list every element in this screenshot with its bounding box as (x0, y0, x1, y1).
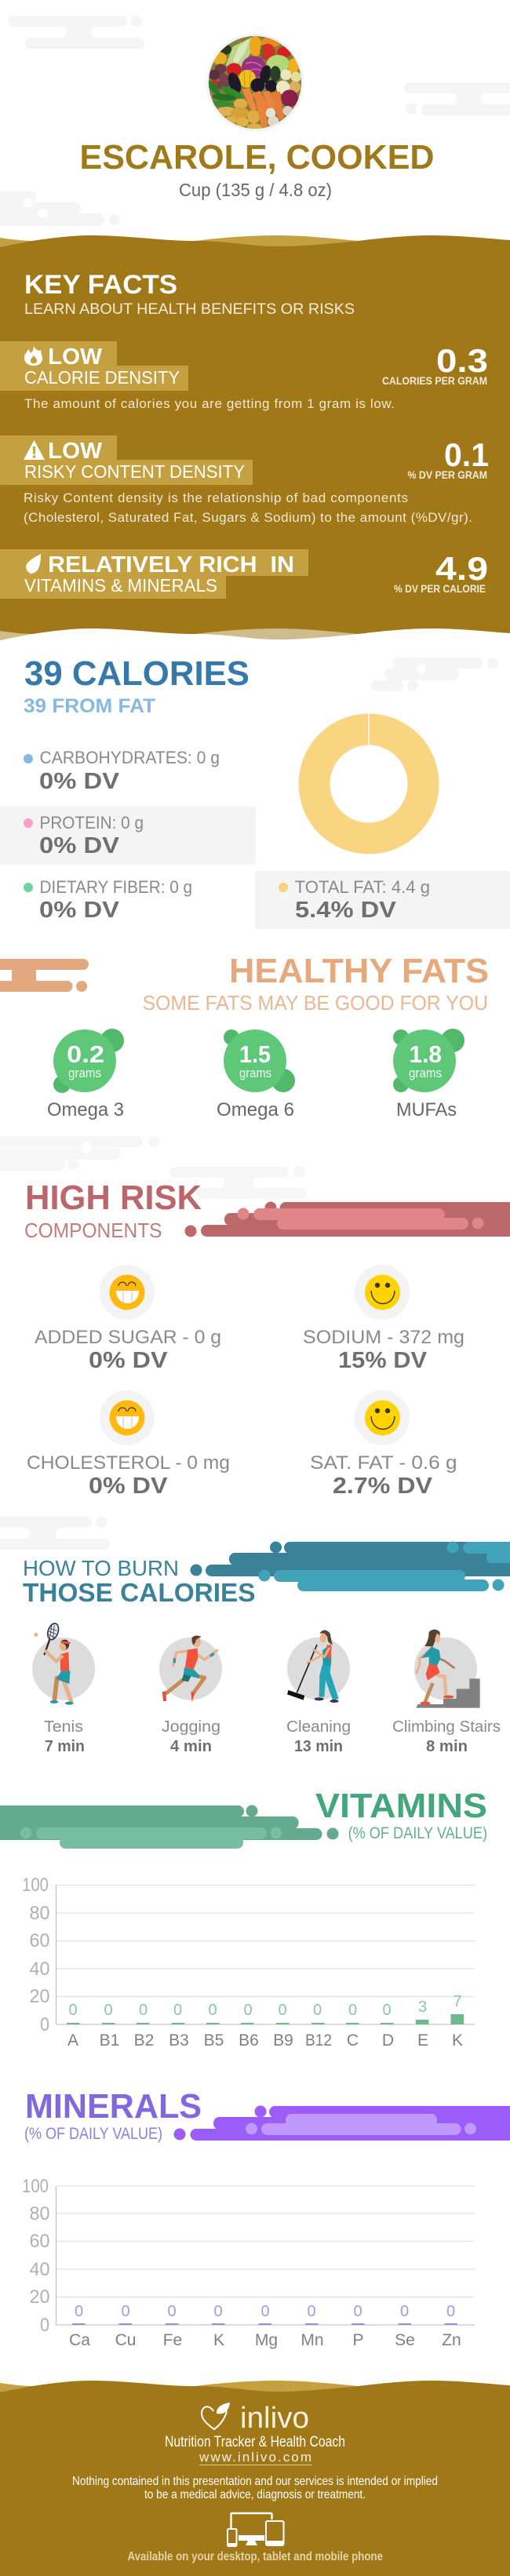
bar chart: vitamins: B2 (134, 2031, 154, 2050)
decorative stripes (185, 1202, 510, 1237)
heading: HEALTHY FATS (229, 952, 489, 990)
activity: cleaning: 13 min (294, 1738, 343, 1755)
bar chart: minerals: 0 (400, 2303, 409, 2320)
added sugar: 0% DV (89, 1348, 168, 1373)
legend: dietary fiber: DIETARY FIBER: 0 g (39, 877, 192, 897)
panel: calories (0, 654, 510, 929)
legend: dietary fiber: 0% DV (39, 898, 120, 923)
bar chart: minerals: Cu (115, 2331, 136, 2349)
added sugar: ADDED SUGAR - 0 g (35, 1327, 221, 1348)
bar chart: minerals: 0 (213, 2303, 223, 2320)
icon: person on stairs (416, 1630, 480, 1708)
value: 4.9 (435, 550, 488, 587)
unit: CALORIES PER GRAM (382, 375, 487, 387)
panel: key facts (0, 235, 510, 655)
legend: carbohydrates: 0% DV (39, 769, 120, 794)
mufas: MUFAs (396, 1099, 457, 1120)
legend: protein: PROTEIN: 0 g (39, 813, 144, 833)
label: RELATIVELY RICH IN (48, 552, 294, 578)
bar chart: vitamins: 20 (30, 1986, 50, 2007)
legend: carbohydrates: CARBOHYDRATES: 0 g (39, 748, 220, 767)
heading: MINERALS (25, 2087, 202, 2126)
subheading: (% OF DAILY VALUE) (348, 1824, 487, 1842)
heading: VITAMINS (315, 1787, 487, 1825)
icon: runner (162, 1635, 217, 1702)
cholesterol: 0% DV (89, 1474, 168, 1499)
label: LOW (48, 439, 103, 464)
icon: flame (24, 345, 42, 366)
bar chart: minerals: 100 (22, 2176, 49, 2197)
bar chart: vitamins: C (347, 2031, 359, 2050)
activity: jogging: 4 min (170, 1738, 212, 1755)
bar chart: vitamins: 60 (30, 1930, 50, 1951)
saturated fat: 2.7% DV (333, 1474, 433, 1499)
tagline: Nutrition Tracker & Health Coach (165, 2434, 345, 2450)
serving size: Cup (135 g / 4.8 oz) (179, 180, 332, 200)
bar chart: vitamins: 100 (22, 1875, 49, 1896)
bar chart: minerals: 60 (30, 2231, 50, 2252)
header panel (0, 16, 510, 226)
bar chart: minerals: 40 (30, 2259, 50, 2280)
activity: jogging: Jogging (162, 1718, 220, 1736)
availability note: Available on your desktop, tablet and mobile phone (127, 2550, 383, 2563)
bar chart: vitamins: 0 (208, 2002, 217, 2019)
bar chart: minerals: Fe (163, 2331, 182, 2349)
website link: www.inlivo.com (199, 2450, 311, 2465)
activity: tennis (32, 1622, 95, 1755)
saturated fat (310, 1390, 457, 1499)
activity: climbing stairs: Climbing Stairs (392, 1718, 501, 1736)
mufas (393, 1029, 464, 1120)
title: ESCAROLE, COOKED (80, 138, 435, 177)
mufas: grams (409, 1066, 442, 1080)
bar chart: vitamins: B1 (100, 2031, 119, 2050)
bar chart: minerals: Zn (442, 2331, 461, 2349)
unit: % DV PER CALORIE (394, 583, 486, 595)
label: LOW (48, 344, 103, 370)
bar chart: vitamins: B9 (273, 2031, 293, 2050)
bar chart: vitamins: B12 (305, 2031, 332, 2050)
fact: calorie density (0, 341, 488, 411)
heading: calories: 39 CALORIES (24, 654, 250, 693)
bar chart: vitamins: 0 (40, 2014, 49, 2035)
icon: smile face (355, 1390, 410, 1445)
description: Risky Content density is the relationship of bad components (24, 490, 408, 505)
bar chart: minerals: 20 (30, 2286, 50, 2308)
bar chart: vitamins: 0 (104, 2002, 113, 2019)
bar chart: minerals: Se (395, 2331, 415, 2349)
decorative cloud (0, 959, 89, 992)
subheading: LEARN ABOUT HEALTH BENEFITS OR RISKS (24, 301, 355, 318)
bar chart: vitamins: K (452, 2031, 463, 2050)
bar chart: vitamins: B6 (239, 2031, 259, 2050)
icon: warning (24, 440, 45, 460)
legend: dietary fiber (24, 877, 192, 923)
icon: smile face (355, 1265, 410, 1320)
mufas: 1.8 (410, 1040, 442, 1068)
icon: grin face (100, 1265, 155, 1320)
activity: climbing stairs: 8 min (426, 1738, 468, 1755)
activity: cleaning: Cleaning (286, 1718, 351, 1736)
omega 3: Omega 3 (47, 1099, 124, 1120)
omega 3 (47, 1029, 124, 1120)
icon: leaf (26, 554, 41, 574)
logo (202, 2402, 309, 2435)
subheading: SOME FATS MAY BE GOOD FOR YOU (143, 991, 488, 1015)
bar chart: vitamins: 0 (313, 2002, 322, 2019)
bar chart: vitamins: 0 (278, 2002, 287, 2019)
disclaimer: Nothing contained in this presentation and our services is intended or implied (72, 2475, 438, 2488)
bar chart: minerals (22, 2176, 475, 2349)
subheading: (% OF DAILY VALUE) (24, 2125, 162, 2143)
panel: minerals (22, 2087, 510, 2349)
disclaimer: to be a medical advice, diagnosis or treatment. (144, 2488, 366, 2501)
cholesterol: CHOLESTEROL - 0 mg (27, 1452, 230, 1474)
bar chart: minerals: Mn (301, 2331, 324, 2349)
heading: key facts: KEY FACTS (24, 270, 177, 300)
panel: vitamins (0, 1787, 487, 2050)
sodium: SODIUM - 372 mg (303, 1327, 464, 1348)
fact: risky content density (0, 435, 489, 525)
legend: total fat (255, 871, 510, 929)
bar chart: minerals: Mg (255, 2331, 278, 2349)
unit: % DV PER GRAM (408, 469, 487, 481)
heading: THOSE CALORIES (23, 1579, 256, 1608)
saturated fat: SAT. FAT - 0.6 g (310, 1452, 457, 1474)
bar chart: vitamins: A (67, 2031, 78, 2050)
added sugar (35, 1265, 221, 1373)
decorative stripes (190, 1541, 510, 1591)
activity: tennis: 7 min (45, 1738, 85, 1755)
bar chart: vitamins: 80 (30, 1903, 50, 1924)
legend: total fat: TOTAL FAT: 4.4 g (295, 877, 430, 897)
omega 3: 0.2 (67, 1040, 104, 1068)
bar chart: minerals: 0 (167, 2303, 177, 2320)
label: RISKY CONTENT DENSITY (24, 461, 245, 482)
fact: vitamins and minerals (0, 549, 488, 599)
legend: protein: 0% DV (39, 833, 120, 858)
bar chart: vitamins: D (382, 2031, 394, 2050)
sodium (303, 1265, 464, 1373)
decorative stripes (0, 1805, 339, 1849)
label: CALORIE DENSITY (24, 367, 180, 388)
activity: jogging (159, 1635, 222, 1755)
legend: protein (0, 807, 256, 865)
bar chart: vitamins: 40 (30, 1958, 50, 1980)
activity: tennis: Tenis (44, 1718, 83, 1736)
bar chart: vitamins: E (417, 2031, 428, 2050)
food photo (206, 33, 304, 132)
activity: climbing stairs (392, 1630, 501, 1755)
logo: inlivo (240, 2402, 309, 2435)
bar chart: vitamins (22, 1875, 475, 2050)
bar chart: vitamins: B5 (204, 2031, 224, 2050)
cholesterol (27, 1390, 230, 1499)
description: (Cholesterol, Saturated Fat, Sugars & Sodium) to the amount (%DV/gr). (24, 510, 472, 525)
icon: tennis player (35, 1622, 74, 1705)
bar chart: minerals: Ca (69, 2331, 90, 2349)
sodium: 15% DV (338, 1348, 428, 1373)
omega 3: grams (68, 1066, 101, 1080)
heading: HOW TO BURN (23, 1556, 179, 1580)
bar chart: minerals: 0 (75, 2303, 83, 2320)
bar chart: vitamins: 0 (243, 2002, 253, 2019)
legend: total fat: 5.4% DV (295, 898, 397, 923)
bar chart: vitamins: 0 (382, 2002, 392, 2019)
bar chart: vitamins: 7 (453, 1993, 462, 2010)
icon: grin face (100, 1390, 155, 1445)
description: The amount of calories you are getting from 1 gram is low. (24, 396, 395, 411)
panel: how to burn (0, 1517, 510, 1755)
decorative stripes (174, 2106, 510, 2141)
panel: healthy fats (0, 952, 489, 1120)
omega 6: Omega 6 (217, 1099, 294, 1120)
bar chart: minerals: 0 (353, 2303, 362, 2320)
bar chart: minerals: 0 (40, 2315, 49, 2336)
bar chart: minerals: 0 (260, 2303, 270, 2320)
subheading: 39 FROM FAT (24, 695, 155, 717)
icon: person sweeping (287, 1630, 339, 1703)
activity: cleaning (286, 1630, 351, 1755)
label: VITAMINS & MINERALS (24, 575, 217, 596)
bar chart: vitamins: B3 (169, 2031, 189, 2050)
bar chart: minerals: 0 (446, 2303, 455, 2320)
bar chart: minerals: P (352, 2331, 364, 2349)
omega 6: 1.5 (239, 1040, 271, 1068)
bar chart: minerals: 0 (307, 2303, 316, 2320)
panel: footer (0, 2381, 510, 2576)
value: 0.1 (444, 436, 489, 473)
value: 0.3 (436, 342, 488, 379)
panel: high risk (0, 1136, 510, 1499)
icon: devices (228, 2513, 284, 2546)
bar chart: minerals: 0 (121, 2303, 130, 2320)
bar chart: vitamins: 0 (348, 2002, 357, 2019)
bar chart: vitamins: 0 (173, 2002, 182, 2019)
omega 6 (217, 1029, 295, 1120)
subheading: COMPONENTS (24, 1219, 162, 1242)
bar chart: minerals: K (213, 2331, 224, 2349)
bar chart: vitamins: 3 (418, 1998, 427, 2016)
bar chart: vitamins: 0 (139, 2002, 148, 2019)
bar chart: minerals: 80 (30, 2203, 50, 2224)
omega 6: grams (239, 1066, 271, 1080)
heading: HIGH RISK (25, 1179, 202, 1217)
donut chart (314, 712, 424, 838)
legend: carbohydrates (24, 748, 220, 794)
bar chart: vitamins: 0 (68, 2002, 78, 2019)
